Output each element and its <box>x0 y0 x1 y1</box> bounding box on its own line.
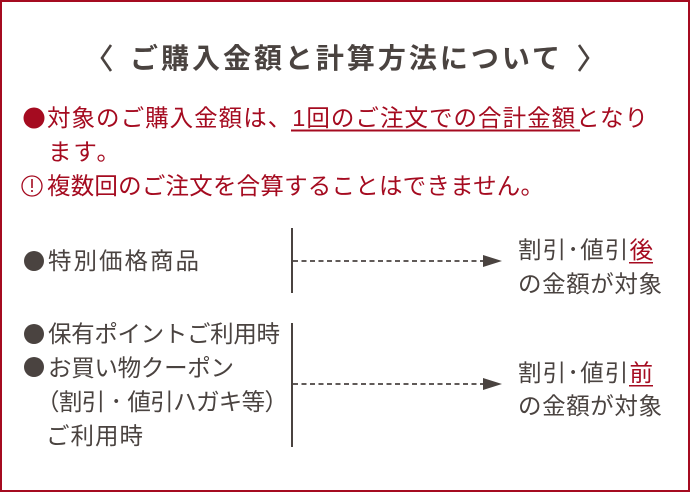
row 2 result text: の金額が対象 <box>518 393 662 419</box>
row 2 label: points and coupons: ご利用時 <box>46 423 143 449</box>
row 2 label: points and coupons: お買い物クーポン <box>48 355 234 381</box>
red notice text block <box>24 105 648 165</box>
warning text block: 複数回のご注文を合算することはできません。 <box>47 173 544 199</box>
row 1 label: special price items: 特別価格商品 <box>48 248 199 274</box>
row 1 result text: の金額が対象 <box>518 271 662 297</box>
row 2 result text <box>518 360 662 419</box>
row 1 result text <box>518 237 662 297</box>
row 1 result text: 割引･値引後 <box>518 237 653 263</box>
row 2 result text: 割引･値引前 <box>518 360 653 386</box>
row 2 label: points and coupons: （割引 ･ 値引ハガキ等） <box>36 389 288 415</box>
row 2 bracket and arrow <box>291 323 502 447</box>
row 2 label: points and coupons: 保有ポイントご利用時 <box>48 321 280 347</box>
row 1 bracket and arrow <box>291 228 502 293</box>
red notice text block: 対象のご購入金額は、1回のご注文での合計金額となり <box>47 105 648 131</box>
row 2 label: points and coupons <box>24 321 288 449</box>
title: ご購入金額と計算方法について <box>130 42 560 74</box>
red notice text block: ます。 <box>48 139 120 165</box>
